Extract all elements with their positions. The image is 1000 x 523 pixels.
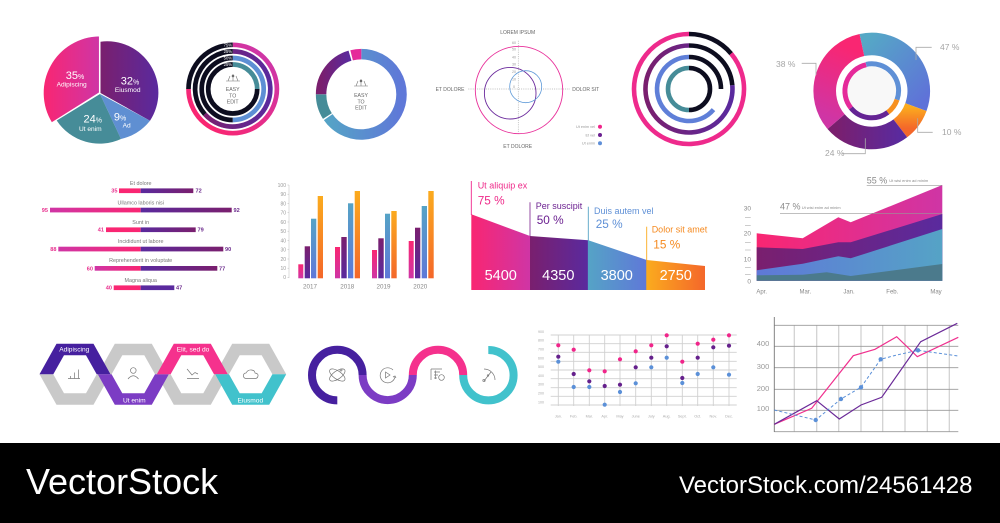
bar titles: Et dolore — [130, 181, 151, 187]
axis labels — [278, 183, 286, 281]
outer ring black — [689, 34, 731, 54]
horizontal grid — [774, 325, 958, 432]
radar scale: 0 — [513, 85, 515, 89]
line pink — [774, 337, 958, 424]
center label: EASY — [226, 87, 240, 93]
radar axis labels: ET DOLORE — [503, 144, 533, 150]
radar legend: Ut enim — [582, 142, 595, 146]
hexagon segment: Elit, sed do — [157, 344, 228, 374]
ring percent labels: 25% — [224, 62, 232, 67]
step headings: Per suscipit — [536, 201, 583, 211]
segment teal — [463, 350, 514, 400]
pie labels: Ad — [123, 122, 131, 130]
panel: thick concentric rings — [634, 34, 744, 144]
icon: person — [128, 368, 138, 379]
y axis: 30 — [744, 206, 751, 212]
x axis: Jan. — [843, 290, 855, 296]
right values: 92 — [234, 208, 240, 214]
line purple — [774, 323, 957, 424]
icon: bar chart — [68, 370, 80, 378]
donut segment pink — [352, 54, 361, 55]
y labels — [538, 330, 544, 404]
hexagon segment: Adipiscing — [40, 344, 110, 374]
panel: stepped funnel area — [471, 180, 708, 290]
axis labels: 100 — [278, 183, 286, 189]
left axis — [773, 317, 775, 432]
left values: 88 — [50, 247, 56, 253]
y labels: 100 — [757, 404, 769, 413]
circle blue — [510, 71, 542, 103]
pie labels: 24% — [83, 114, 102, 126]
panel: serpentine process ribbon — [312, 350, 514, 400]
center label: EDIT — [355, 106, 368, 112]
hexagon segment: Ut enim — [98, 374, 169, 405]
columns 2018 — [335, 191, 360, 278]
donut segment teal — [321, 94, 327, 116]
step 2750 — [647, 260, 705, 290]
axis labels: 60 — [280, 220, 286, 226]
year labels: 2018 — [340, 283, 355, 290]
ring 2 — [195, 51, 270, 127]
icon: list — [431, 369, 444, 380]
axis labels: 30 — [280, 248, 286, 254]
panel: multi line chart — [757, 317, 958, 432]
axis — [288, 185, 289, 278]
step 4350 — [530, 236, 588, 290]
left values: 41 — [98, 228, 104, 234]
center label: EDIT — [227, 100, 239, 106]
y labels: 200 — [757, 384, 769, 393]
segment violet — [363, 375, 413, 400]
radar scale: 50 — [512, 48, 516, 52]
step values: 3800 — [601, 268, 633, 284]
ring percent labels: 50% — [224, 56, 232, 60]
step headings: Ut aliquip ex — [478, 180, 528, 190]
panel: grouped column chart — [278, 183, 434, 290]
month labels: May — [616, 415, 624, 419]
step headings: 25 % — [596, 217, 623, 231]
y axis: 10 — [744, 256, 751, 264]
outer ring pink — [634, 34, 744, 144]
hexagon labels: Elit, sed do — [177, 346, 210, 353]
third ring black — [689, 57, 721, 89]
icon: atom — [328, 367, 347, 383]
callout labels: 38 % — [776, 59, 796, 69]
month labels — [555, 415, 733, 419]
second ring purple — [645, 45, 732, 132]
value lines — [780, 185, 942, 213]
x axis — [756, 290, 942, 296]
columns 2020 — [409, 191, 434, 278]
outer donut — [825, 44, 919, 138]
pie labels: 35% — [66, 70, 84, 82]
axis labels: 70 — [280, 210, 286, 216]
y axis — [744, 206, 751, 285]
step headings — [478, 180, 708, 251]
month labels: July — [648, 415, 655, 419]
month labels: Apr. — [601, 415, 608, 419]
step values: 5400 — [485, 268, 517, 284]
radar scale: 30 — [512, 63, 516, 67]
blue points — [814, 348, 920, 422]
value labels: Ut wisi enim ad minim — [889, 178, 929, 183]
y labels: 300 — [757, 362, 769, 371]
step values — [485, 268, 692, 284]
axis labels: 80 — [280, 201, 286, 207]
month labels: Oct. — [694, 415, 701, 419]
inner donut — [845, 64, 899, 118]
pie labels: 32% — [121, 76, 139, 88]
center label: TO — [229, 93, 236, 99]
pie labels: Ut enim — [79, 126, 102, 133]
axis labels: 40 — [280, 238, 286, 244]
ring percent labels: 75% — [224, 42, 232, 48]
segment dark purple — [312, 350, 363, 400]
ring percent labels: 25% — [224, 49, 232, 54]
y labels: 600 — [538, 356, 544, 360]
year labels: 2019 — [376, 283, 391, 290]
ring 3 — [202, 58, 264, 120]
circle purple — [484, 67, 536, 119]
value labels: 55 % — [867, 176, 887, 186]
step values: 2750 — [660, 268, 692, 284]
bar titles: Reprehenderit in voluptate — [109, 258, 172, 264]
month labels: Jan. — [555, 415, 562, 419]
step headings: 75 % — [478, 194, 505, 208]
axes — [468, 41, 570, 134]
columns 2019 — [372, 211, 397, 278]
panel: radar circles chart — [436, 30, 602, 150]
gray hexagon halves — [40, 344, 286, 405]
bar titles: Sunt in — [132, 220, 149, 226]
callout labels: 47 % — [940, 42, 960, 52]
area purple — [757, 214, 942, 281]
month labels: Aug. — [663, 415, 671, 419]
segment pink — [413, 350, 463, 375]
y labels: 400 — [757, 339, 769, 348]
pie slice: Ut enim — [57, 94, 121, 144]
footer band — [0, 443, 1000, 523]
y labels: 200 — [538, 391, 544, 395]
pie labels: 9% — [114, 112, 126, 124]
axis labels: 0 — [283, 275, 286, 281]
value labels: Ut wisi enim ad minim — [802, 205, 841, 210]
right values: 79 — [198, 228, 204, 234]
right bars — [141, 188, 232, 290]
y axis: 20 — [744, 230, 751, 238]
ring 1 — [188, 45, 277, 133]
step 5400 — [471, 214, 530, 290]
pie slice: Eiusmod — [100, 41, 158, 121]
area blue — [757, 229, 942, 281]
radar legend — [576, 125, 602, 146]
y labels: 100 — [538, 400, 544, 404]
right values: 90 — [225, 247, 231, 253]
radar axis labels: ET DOLORE — [436, 87, 465, 93]
panel: monthly dot plot — [538, 330, 737, 419]
step headings: Dolor sit amet — [652, 225, 708, 235]
axis labels: 20 — [280, 257, 286, 263]
month labels: Nov. — [710, 415, 717, 419]
step headings: 50 % — [537, 213, 564, 227]
panel: diverging bar chart — [42, 181, 240, 292]
donut center — [847, 67, 896, 115]
second ring black — [689, 46, 732, 85]
right values: 77 — [219, 266, 225, 272]
right values: 47 — [176, 286, 182, 292]
left values: 40 — [106, 286, 112, 292]
panel: stacked area chart — [744, 176, 942, 296]
radar scale — [512, 41, 516, 89]
y labels: 900 — [538, 330, 544, 334]
icon: play refresh — [380, 368, 396, 383]
bar titles: Ullamco laboris nisi — [117, 200, 164, 206]
blue dots — [556, 356, 731, 407]
left bars — [50, 188, 141, 290]
panel: segmented donut — [321, 54, 402, 134]
y labels — [757, 339, 769, 413]
donut segment blue — [328, 54, 402, 134]
left values: 95 — [42, 208, 48, 214]
month labels: Dec. — [725, 415, 733, 419]
callout lines — [802, 47, 933, 154]
right values: 72 — [196, 189, 202, 195]
bar titles: Incididunt ut labore — [118, 239, 163, 245]
year labels — [303, 283, 428, 290]
hexagon labels: Adipiscing — [59, 346, 90, 353]
pie labels — [57, 70, 141, 133]
month labels: Mar. — [586, 415, 593, 419]
left values — [42, 189, 118, 292]
month labels: June — [632, 415, 640, 419]
value labels: 47 % — [780, 202, 801, 212]
y labels: 800 — [538, 339, 544, 343]
footer url: VectorStock.com/24561428 — [679, 472, 972, 499]
pie slice: Adipiscing — [43, 36, 99, 123]
line blue dashed — [774, 350, 958, 420]
vertical grid — [794, 325, 949, 432]
x axis: Mar. — [799, 290, 811, 296]
callout labels: 24 % — [825, 148, 845, 158]
radar legend: Ut enim vel — [576, 125, 595, 129]
y axis: 0 — [747, 278, 751, 285]
footer brand: VectorStock — [26, 461, 219, 502]
year labels: 2017 — [303, 283, 317, 290]
hexagon labels: Ut enim — [123, 398, 146, 405]
step headings: 15 % — [653, 237, 681, 251]
radar axis labels — [436, 30, 599, 150]
circle pink — [475, 46, 563, 134]
radar axis labels: LOREM IPSUM — [500, 30, 535, 36]
month labels: Feb. — [570, 415, 578, 419]
step values: 4350 — [542, 268, 574, 284]
panel: concentric progress rings with easy to edit center — [188, 42, 277, 133]
radar axis labels: DOLOR SIT — [572, 87, 599, 93]
axis labels: 10 — [280, 266, 286, 272]
columns 2017 — [298, 196, 323, 278]
area teal — [757, 264, 942, 281]
grid — [551, 335, 737, 406]
year labels: 2020 — [413, 283, 428, 290]
value labels — [780, 176, 929, 212]
pink dots — [556, 333, 731, 373]
area pink — [757, 185, 942, 281]
radar scale: 40 — [512, 55, 516, 59]
callout labels — [776, 42, 962, 158]
x axis: Apr. — [756, 290, 767, 296]
step markers — [471, 181, 647, 290]
hexagon labels: Eiusmod — [237, 398, 263, 405]
icon: pen tool — [354, 79, 368, 86]
pie slice: Ad — [100, 94, 150, 139]
x axis: May — [930, 290, 942, 296]
radar legend: Et vel — [586, 133, 595, 137]
y labels: 500 — [538, 365, 544, 369]
bar titles — [109, 181, 172, 284]
center label: EASY — [354, 93, 368, 99]
ring 4 — [208, 64, 257, 114]
bar titles: Magna aliqua — [125, 278, 157, 284]
y labels: 400 — [538, 374, 544, 378]
purple dots — [556, 344, 731, 388]
panel: exploded pie chart — [43, 36, 158, 144]
y labels: 300 — [538, 383, 544, 387]
step 3800 — [588, 240, 647, 290]
hexagon labels — [59, 346, 263, 405]
ring percent labels — [224, 42, 232, 67]
right values — [176, 189, 240, 292]
inner ring black — [689, 68, 710, 110]
left values: 35 — [111, 189, 118, 195]
icon: cloud — [243, 370, 258, 378]
pie labels: Adipiscing — [57, 82, 87, 88]
third ring blue — [657, 57, 714, 121]
step headings: Duis autem vel — [594, 206, 654, 216]
radar scale: 10 — [512, 77, 516, 81]
x axis: Feb. — [886, 290, 899, 296]
radar scale: 60 — [512, 41, 516, 45]
donut segment purple — [321, 56, 350, 94]
pie labels: Eiusmod — [115, 87, 141, 94]
icon: pen tool — [226, 74, 240, 81]
panel: interlocking hexagons — [40, 344, 286, 405]
icon: line graph — [187, 369, 199, 378]
y labels: 700 — [538, 348, 544, 352]
hexagon segment: Eiusmod — [215, 374, 286, 405]
axis labels: 90 — [280, 192, 286, 198]
callout labels: 10 % — [942, 127, 962, 137]
month labels: Sept. — [678, 415, 687, 419]
icon: gauge — [483, 369, 495, 382]
center label: TO — [357, 99, 365, 105]
axis labels: 50 — [280, 229, 286, 235]
left values: 60 — [87, 266, 93, 272]
inner ring teal — [668, 68, 689, 110]
panel: double donut with callouts — [776, 42, 962, 158]
radar scale: 20 — [512, 70, 516, 74]
